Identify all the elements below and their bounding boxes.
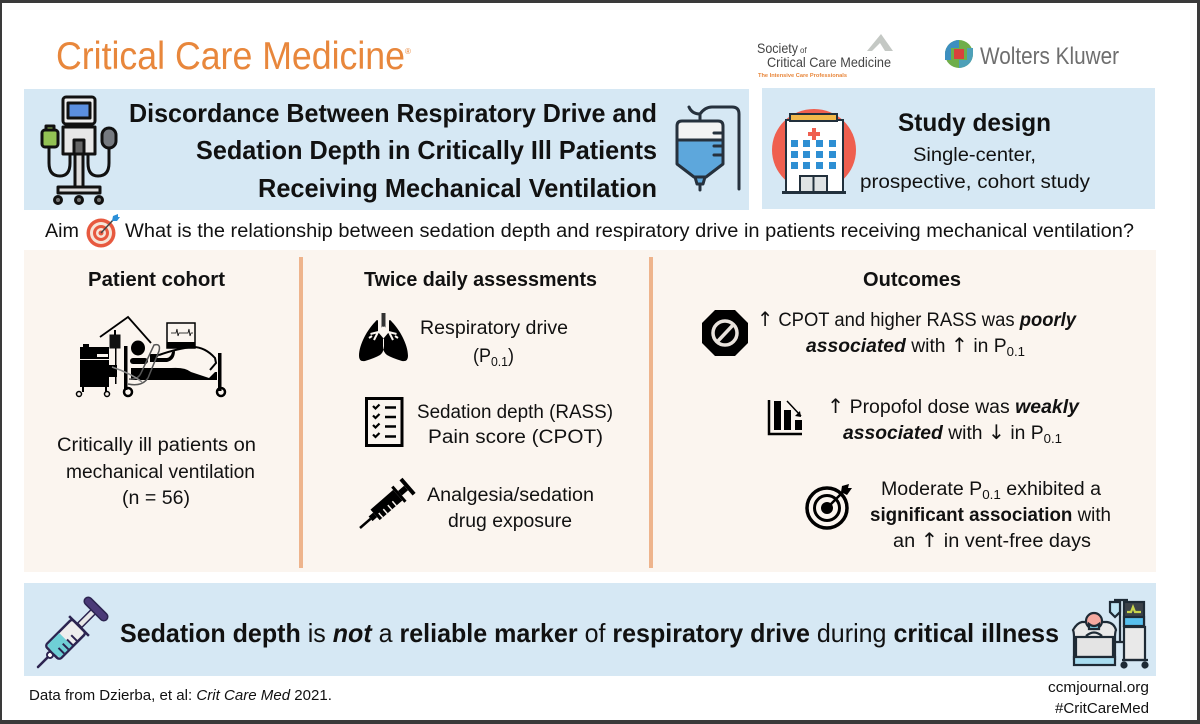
- footer links: #CritCareMed: [1055, 700, 1149, 717]
- text: design description: [860, 145, 1091, 193]
- panel: title banner: [24, 89, 749, 210]
- icon: IV bag: [677, 107, 739, 190]
- heading: assessments: Twice daily assessments: [364, 269, 597, 291]
- text: cohort description: (n = 56): [122, 488, 190, 509]
- logo: Society of Critical Care Medicine: Society: [757, 40, 798, 56]
- text: outcome three: [870, 479, 1111, 552]
- text: outcome one: 0.1: [1007, 344, 1025, 359]
- logo: Society of Critical Care Medicine: [757, 34, 893, 79]
- text: cohort description: Critically ill patients on: [57, 435, 256, 456]
- text: sedation depth and pain score: Pain score (CPOT): [428, 427, 603, 448]
- icon: syringe: [353, 478, 416, 536]
- title: Discordance Between Respiratory Drive and: [129, 98, 657, 128]
- icon: aim target: [86, 214, 120, 248]
- journal logo: Critical Care Medicine: Critical Care Medicine: [56, 35, 405, 78]
- text: respiratory drive: Respiratory drive: [420, 318, 568, 339]
- footer links: [1048, 679, 1149, 717]
- logo: Wolters Kluwer: Wolters Kluwer: [980, 43, 1119, 70]
- text: outcome three: an ↑ in vent-free days: [893, 528, 1091, 552]
- icon: prohibition octagon: [702, 310, 748, 356]
- logo: Wolters Kluwer: [945, 40, 1119, 70]
- journal logo: Critical Care Medicine: ®: [405, 47, 411, 56]
- text: outcome two: [827, 394, 1080, 446]
- conclusion text: Sedation depth is not a reliable marker of respiratory drive during critical illness: [120, 618, 1059, 648]
- logo: Society of Critical Care Medicine: of: [800, 46, 807, 55]
- title: Receiving Mechanical Ventilation: [258, 173, 657, 203]
- text: outcome three: Moderate P: [881, 479, 979, 500]
- text: outcome one: [757, 307, 1077, 359]
- aim statement: [45, 214, 1134, 248]
- panel: outcomes: [702, 269, 1111, 552]
- icon: lungs: [359, 313, 408, 361]
- panel: conclusion banner: [24, 583, 1156, 678]
- logo: Society of Critical Care Medicine: The Intensive Care Professionals: [758, 73, 847, 79]
- aim statement: Aim: [45, 221, 79, 242]
- footer citation: Data from Dzierba, et al: Crit Care Med 2021.: [29, 687, 332, 704]
- text: respiratory drive: ): [508, 346, 514, 367]
- panel: patient cohort: [57, 269, 256, 509]
- icon: coloured syringe: [27, 596, 109, 678]
- panel: study design: [762, 88, 1155, 209]
- text: drug exposure: Analgesia/sedation: [427, 485, 594, 506]
- text: outcome three: exhibited a: [1001, 479, 1101, 500]
- text: respiratory drive: 0.1: [491, 354, 508, 369]
- logo: Society of Critical Care Medicine: Critical Care Medicine: [767, 54, 891, 70]
- icon: ventilated patient in bed: [76, 317, 225, 396]
- text: outcome two: ↑ Propofol dose was weakly: [827, 394, 1080, 418]
- text: outcome two: associated with ↓ in P: [843, 420, 1043, 444]
- text: sedation depth and pain score: [417, 402, 613, 448]
- text: cohort description: [57, 435, 256, 509]
- heading: study design: Study design: [898, 109, 1051, 137]
- icon: ventilator: [42, 97, 116, 204]
- panel: study details: [24, 250, 1156, 572]
- text: drug exposure: drug exposure: [448, 511, 572, 532]
- text: outcome three: 0.1: [982, 487, 1001, 502]
- text: cohort description: mechanical ventilation: [66, 462, 255, 483]
- text: outcome three: significant association with: [870, 505, 1111, 526]
- icon: hospital: [772, 109, 856, 192]
- text: respiratory drive: (P: [473, 346, 492, 367]
- title: [129, 98, 657, 203]
- panel: twice daily assessments: [353, 269, 613, 536]
- heading: patient cohort: Patient cohort: [88, 269, 225, 291]
- text: design description: prospective, cohort study: [860, 172, 1091, 193]
- text: design description: Single-center,: [913, 145, 1036, 166]
- text: sedation depth and pain score: Sedation depth (RASS): [417, 402, 613, 423]
- heading: outcomes: Outcomes: [863, 269, 961, 291]
- text: outcome one: associated with ↑ in P: [806, 333, 1006, 357]
- icon: checklist: [366, 398, 402, 446]
- icon: patient on ventilator: [1073, 600, 1148, 668]
- title: Sedation Depth in Critically Ill Patients: [196, 135, 657, 165]
- text: respiratory drive: [420, 318, 568, 369]
- icon: bullseye target: [807, 484, 852, 528]
- text: outcome one: ↑ CPOT and higher RASS was poorly: [757, 307, 1077, 331]
- footer links: ccmjournal.org: [1048, 679, 1149, 696]
- icon: declining bar chart: [769, 400, 802, 434]
- text: drug exposure: [427, 485, 594, 532]
- text: outcome two: 0.1: [1044, 431, 1062, 446]
- aim statement: What is the relationship between sedation depth and respiratory drive in patients receiving mechanical ventilation?: [125, 221, 1134, 242]
